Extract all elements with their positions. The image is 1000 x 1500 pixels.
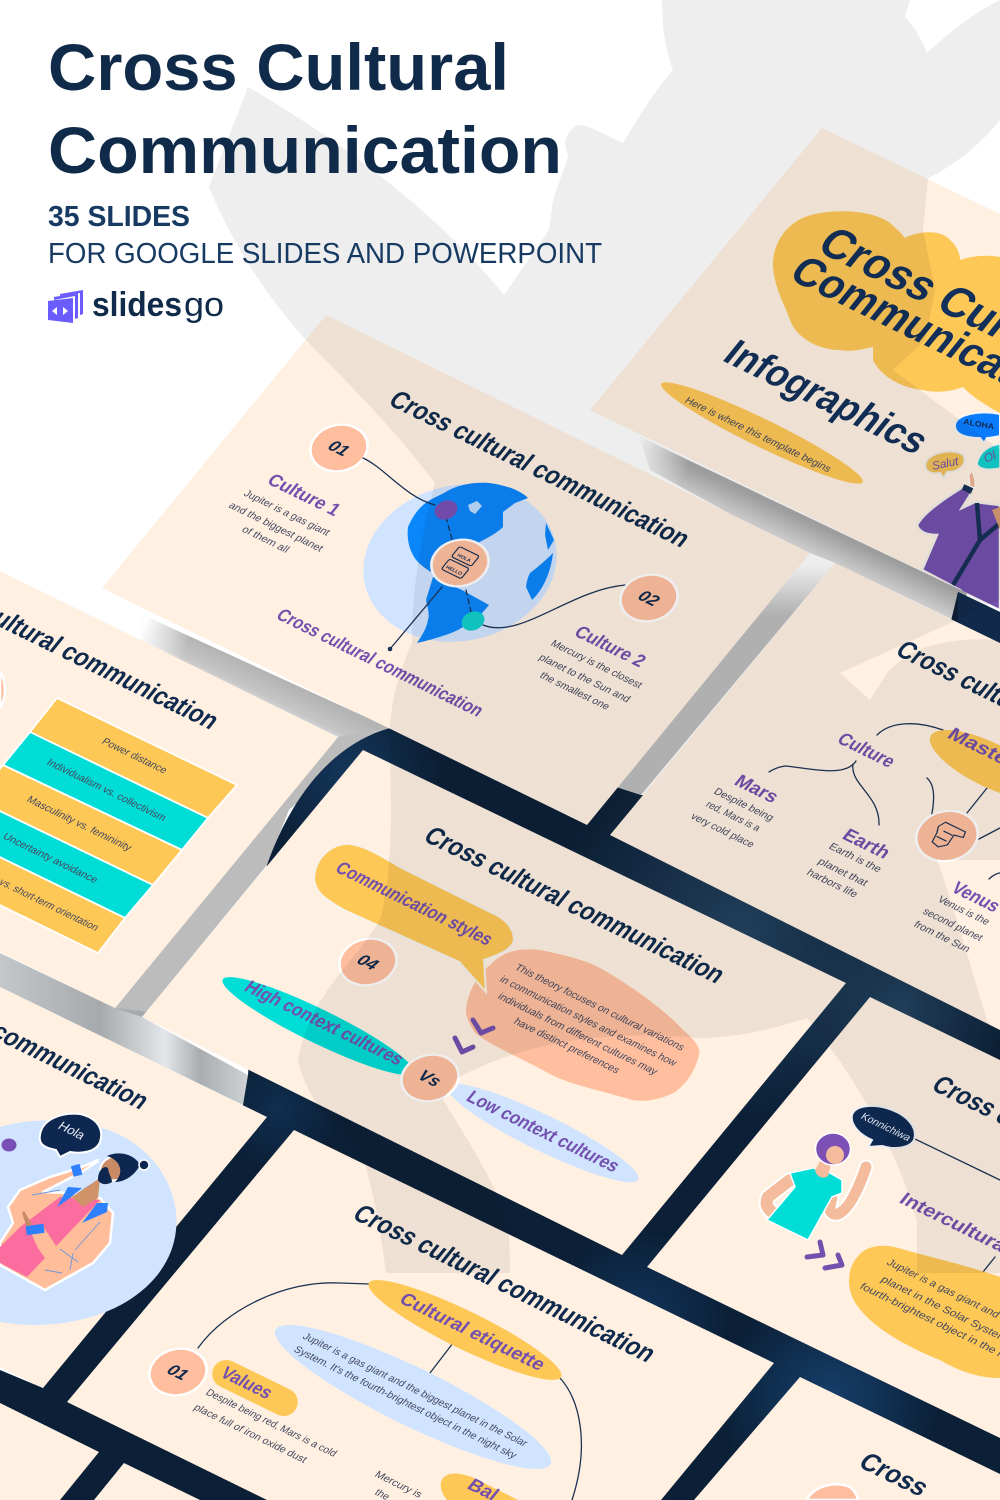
peach text bubble: in communication styles and examines how	[497, 974, 680, 1069]
description pill: System. It's the fourth-brightest object in the night sky	[291, 1344, 520, 1461]
marker 01	[138, 1340, 218, 1404]
gray slide shadows	[0, 437, 967, 1105]
connector line	[915, 1139, 1000, 1272]
slide count: 35 SLIDES	[48, 201, 190, 233]
mars text: red, Mars is a	[703, 799, 763, 834]
subtitle pill	[655, 371, 869, 495]
dimensions table	[0, 698, 237, 953]
illustration: man with speech bubbles: ALOHA	[963, 417, 995, 431]
culture 1 text: and the biggest planet	[226, 500, 326, 554]
values text: Despite being red, Mars is a cold	[203, 1387, 339, 1459]
illustration: man with speech bubbles: Salut	[931, 455, 960, 473]
yellow text bubble	[849, 1246, 1000, 1379]
slide title: Cross cultural communication	[418, 821, 731, 989]
slidesgo logo: slides	[92, 286, 182, 324]
header title: Communication	[48, 113, 562, 187]
culture 2 text	[536, 623, 650, 712]
partial marker	[0, 672, 5, 708]
slide: culture globe	[102, 315, 810, 825]
infographics heading: Infographics	[715, 333, 937, 462]
slide: communication styles	[142, 750, 846, 1255]
connector curves	[769, 724, 1000, 879]
navy background	[0, 580, 1000, 1500]
mars text: Mars	[730, 772, 783, 807]
speech bubble: konnichiwa: Konnichiwa	[858, 1111, 913, 1144]
mars text	[688, 772, 783, 850]
globe connector lines	[363, 458, 442, 649]
speech bubble: hola: Hola	[55, 1119, 89, 1142]
earth text: Earth	[838, 826, 894, 863]
heading pill	[360, 1266, 570, 1394]
vs marker: Vs	[414, 1066, 445, 1090]
slide: power distance dimensions	[0, 567, 338, 1008]
culture label: Culture	[833, 730, 899, 772]
culture 1 text	[226, 471, 345, 555]
slide: cultural etiquette	[67, 1130, 774, 1500]
culture 1 text: Jupiter is a gas giant	[241, 488, 332, 538]
description pill: Jupiter is a gas giant and the biggest planet in the Solar	[300, 1331, 530, 1449]
culture 1 text: Culture 1	[263, 471, 345, 520]
earth text: planet that	[815, 856, 870, 889]
culture 2 text: Culture 2	[570, 623, 650, 671]
peach text bubble: individuals from different cultures may	[495, 991, 661, 1078]
culture 1 text: of them all	[239, 524, 292, 555]
slidesgo logo	[48, 286, 224, 324]
marker 02: 02	[634, 587, 664, 610]
low context pill: Low context cultures	[462, 1088, 624, 1176]
peach text bubble: have distinct preferences	[511, 1016, 622, 1076]
table labels: Uncertainty avoidance	[0, 831, 100, 886]
blue circle	[0, 1120, 177, 1325]
culture 2 text: the smallest one	[537, 670, 612, 712]
marker 04: 04	[353, 951, 383, 974]
slide: man saying hola	[0, 947, 267, 1388]
venus text	[911, 879, 1000, 955]
mars text: Despite being	[711, 786, 776, 824]
peach text bubble: This theory focuses on cultural variations	[512, 962, 687, 1053]
values pill	[208, 1355, 302, 1421]
slide title: Cross cultural communication	[347, 1199, 662, 1367]
platform subtitle: FOR GOOGLE SLIDES AND POWERPOINT	[48, 238, 602, 270]
values text: place full of iron oxide dust	[191, 1402, 309, 1465]
vs marker	[390, 1046, 470, 1110]
illustration: man with speech bubbles	[917, 412, 1000, 625]
earth text	[804, 826, 894, 900]
chevrons	[455, 1020, 493, 1052]
center marker icon	[420, 531, 500, 595]
slide: bottom right	[694, 1377, 1000, 1500]
master pill	[921, 716, 1000, 814]
description pill	[263, 1304, 563, 1490]
marker 01	[299, 416, 379, 480]
center marker icon: HOLA	[456, 553, 472, 564]
marker 01: 01	[163, 1361, 192, 1384]
center marker icon: HELLO	[444, 565, 463, 577]
background silhouette watermark	[209, 0, 1000, 1273]
venus text: second planet	[920, 906, 985, 944]
illustration: man with speech bubbles: Ol	[981, 448, 998, 466]
earth text: Earth is the	[826, 841, 884, 875]
slide: title cover	[590, 128, 1000, 625]
marker 02	[609, 566, 689, 630]
table labels: Masculinity vs. femininity	[24, 794, 135, 854]
yellow speech bubble: Communication styles	[331, 859, 497, 950]
table labels: Individualism vs. collectivism	[44, 757, 169, 824]
heading pill: Cultural etiquette	[395, 1290, 549, 1375]
second item pill	[441, 1474, 518, 1500]
venus text: Venus is the	[935, 894, 992, 928]
cloud shape	[773, 211, 1000, 413]
marker 04	[328, 930, 408, 994]
table labels	[0, 736, 170, 934]
peach text bubble	[466, 949, 699, 1101]
slide: bottom corner pieces	[0, 1403, 200, 1500]
icon marker	[904, 802, 990, 870]
slide: intercultural	[647, 997, 1000, 1438]
second item text: Mercury is	[372, 1469, 425, 1500]
globe caption: Cross cultural communication	[272, 606, 488, 721]
mars text: very cold place	[688, 811, 757, 850]
chevrons	[807, 1242, 842, 1268]
marker 01: 01	[324, 437, 353, 460]
icon: stacked slides	[48, 290, 83, 323]
slide: culture map	[610, 563, 1000, 1030]
table labels: Power distance	[99, 736, 170, 776]
high context pill: High context cultures	[240, 978, 408, 1070]
earth text: harbors life	[804, 867, 860, 900]
values pill: Values	[216, 1364, 277, 1403]
illustration: man	[0, 1152, 149, 1290]
header title	[48, 30, 562, 187]
globe	[325, 456, 625, 670]
speech bubble: konnichiwa	[852, 1106, 915, 1148]
purple dot	[2, 1138, 16, 1152]
illustration: woman	[767, 1133, 866, 1240]
header title: Cross Cultural	[48, 30, 509, 104]
venus text: from the Sun	[911, 919, 973, 955]
culture 2 text: Mercury is the closest	[548, 638, 645, 691]
arc connectors	[198, 1283, 581, 1500]
speech bubble: hola	[40, 1114, 101, 1157]
yellow speech bubble	[314, 844, 514, 992]
slide title: Cross cultural communication	[383, 385, 696, 553]
partial marker	[807, 1484, 858, 1500]
slidesgo logo: go	[184, 286, 224, 324]
culture 2 text: planet to the Sun and	[536, 652, 633, 705]
subtitle pill: Here is where this template begins	[682, 395, 834, 475]
